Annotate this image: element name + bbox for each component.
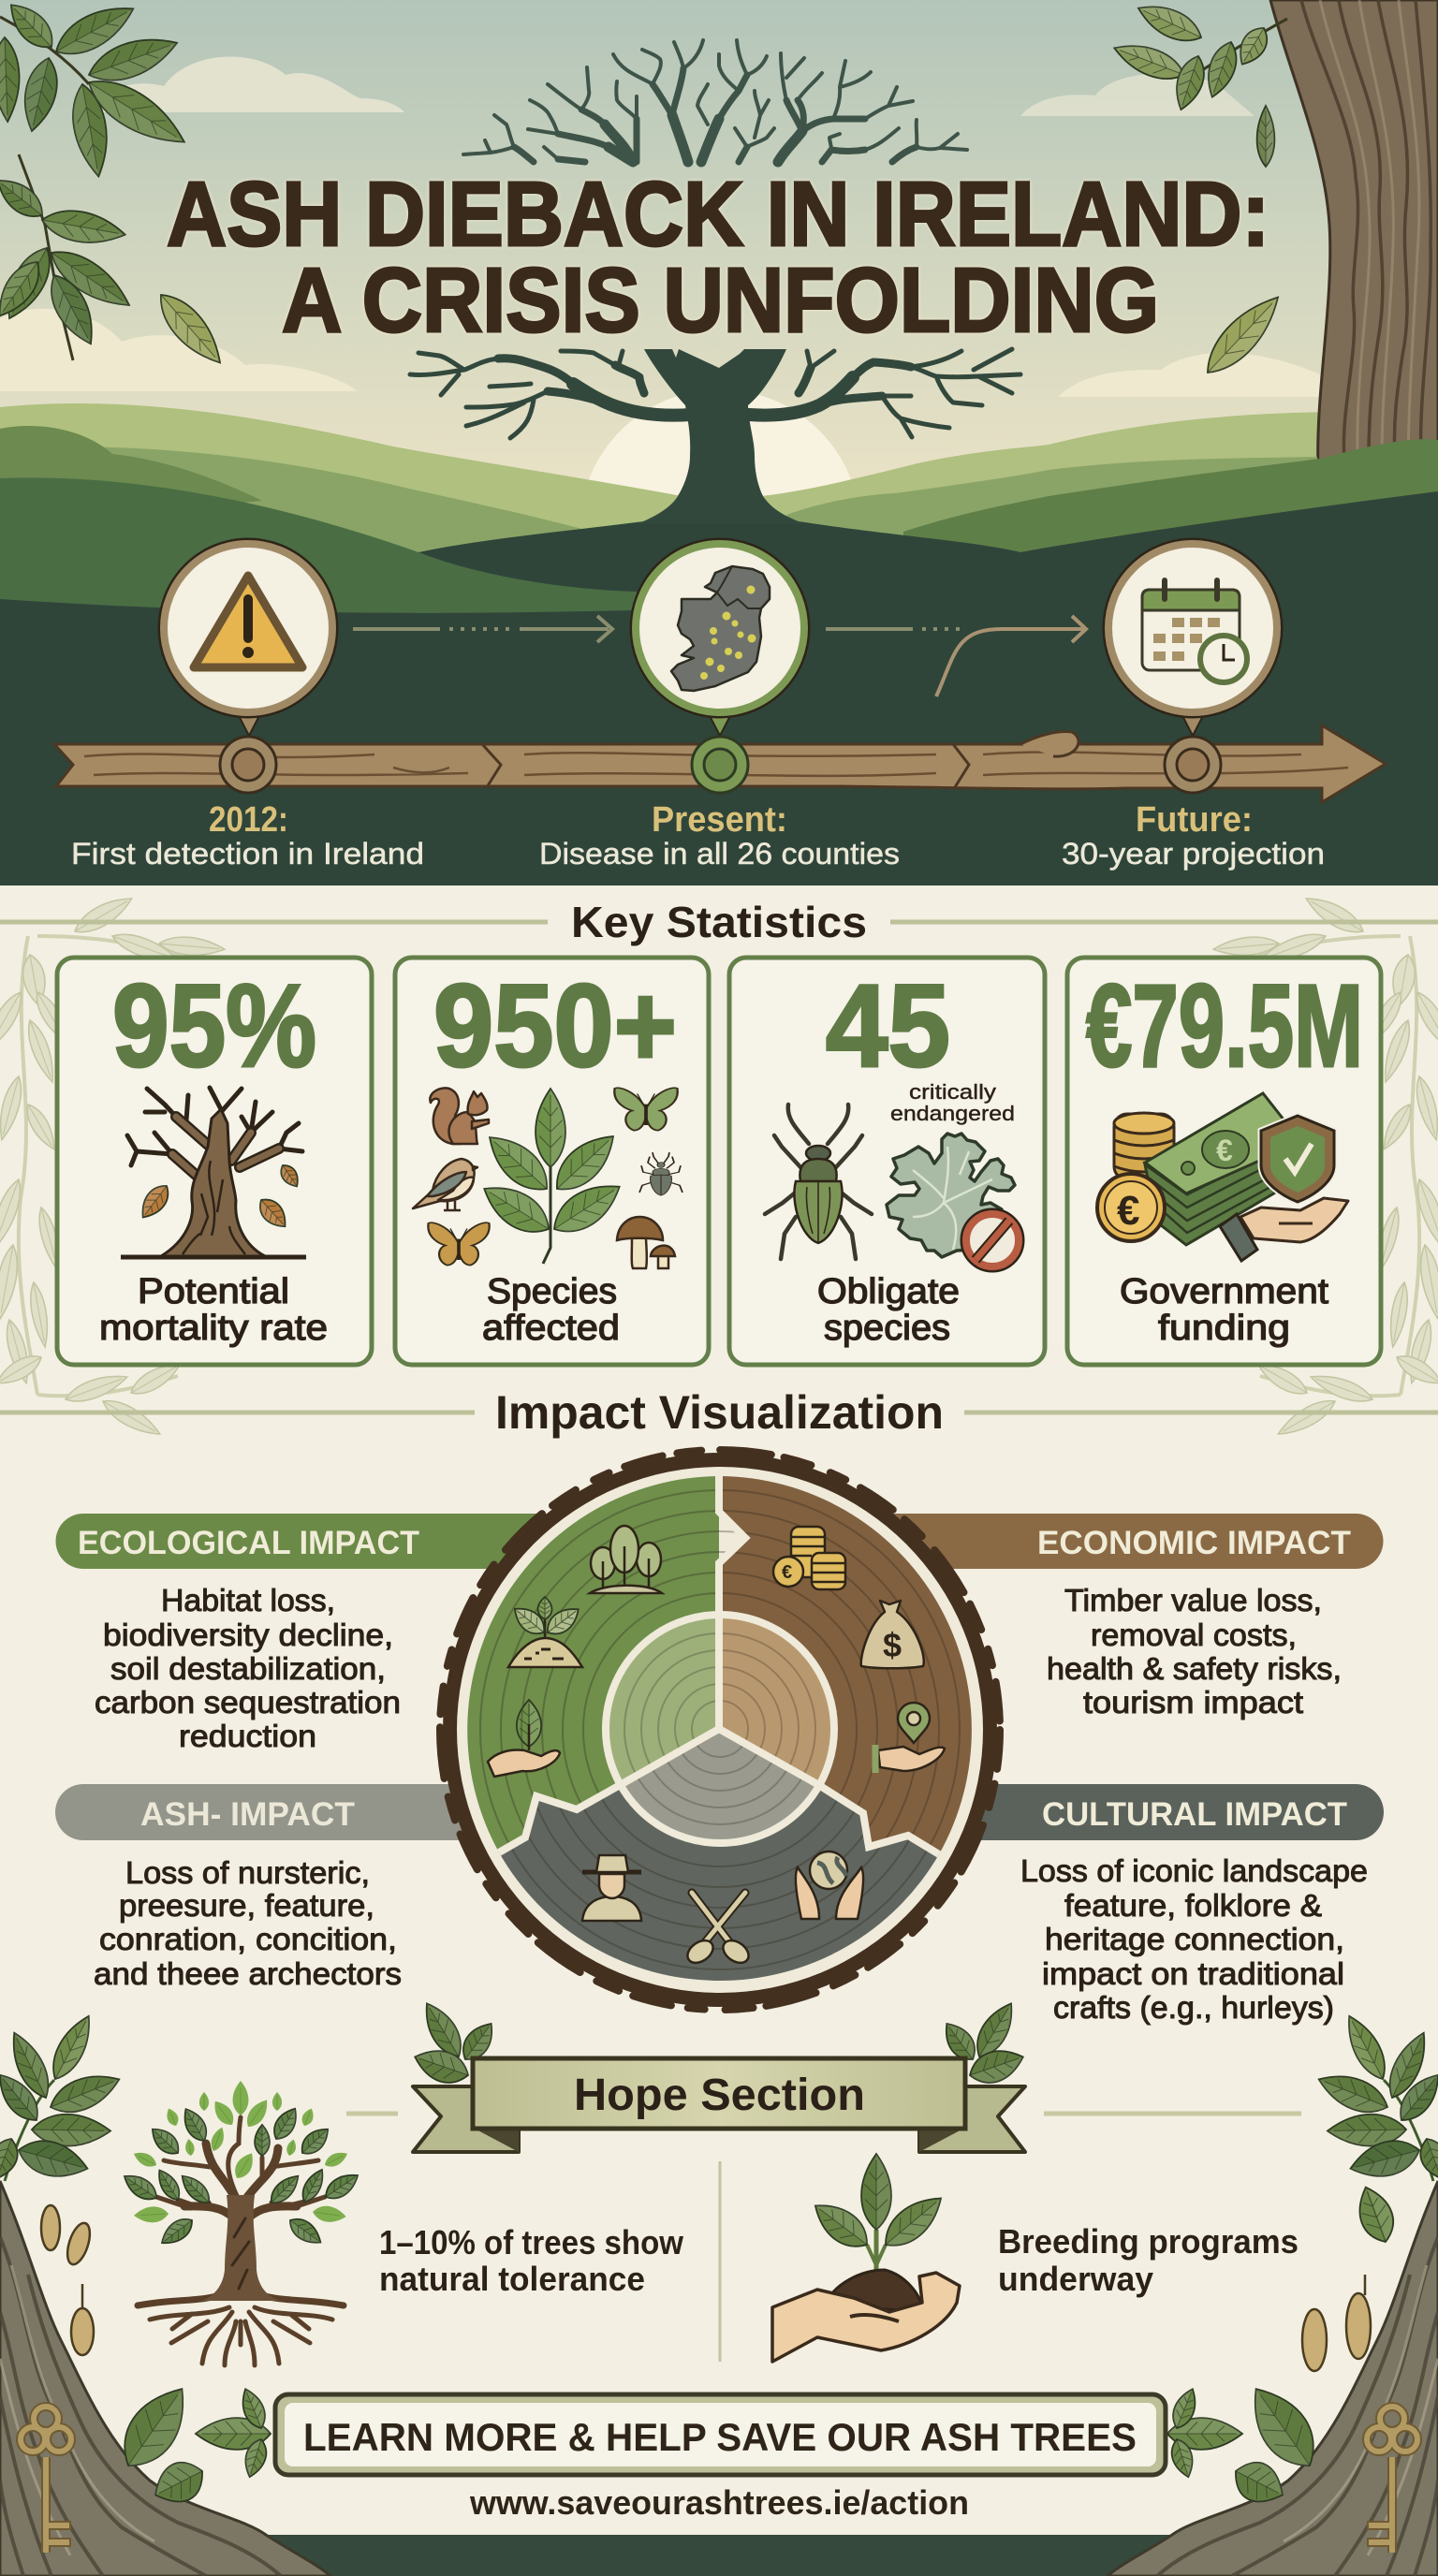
dark foreground ground [0, 491, 1438, 886]
divider [719, 2161, 721, 2362]
panel: economic impact: ECONOMIC IMPACT [1037, 1525, 1351, 1561]
mid hills [0, 426, 1438, 608]
left dark hill [0, 477, 637, 613]
heading: hope section banner: Hope Section [574, 2071, 865, 2120]
sector: economic [719, 1476, 972, 1854]
panel: ash impact: conration, concition, [99, 1922, 397, 1956]
label: Species [487, 1272, 617, 1311]
label: Potential [138, 1272, 289, 1311]
panel: cultural impact: heritage connection, [1045, 1922, 1344, 1956]
label [1120, 1272, 1328, 1348]
sector: ecological [467, 1476, 719, 1852]
icon: money, coins, shield and hand: € [1216, 1134, 1233, 1167]
icon: money, coins, shield and hand: € [1117, 1188, 1139, 1234]
timeline label: present [539, 800, 900, 871]
tree trunk and lower branches [410, 349, 1020, 524]
distant hills [0, 403, 1348, 580]
icon: crossed hurleys [683, 1893, 753, 1968]
timeline label: present: Disease in all 26 counties [539, 837, 900, 871]
icon: small beetle [639, 1152, 682, 1195]
call to action leaves [110, 2376, 1328, 2512]
call to action button: LEARN MORE & HELP SAVE OUR ASH TREES [303, 2415, 1137, 2459]
icon: coin stacks: € [782, 1562, 792, 1583]
label bar [56, 1514, 562, 1569]
heading: impact visualization: Impact Visualization [495, 1386, 944, 1439]
big tree trunk at right [1270, 0, 1438, 468]
icon: map of Ireland [671, 566, 770, 691]
arrow: present to future [826, 616, 1086, 696]
icon: orange butterfly [428, 1222, 490, 1266]
sector: cultural [499, 1729, 939, 1981]
icon: hand holding seedling [488, 1700, 560, 1777]
text: natural tolerance: natural tolerance [379, 2260, 645, 2298]
icon: seeds right [1302, 2182, 1401, 2371]
icon: coin stacks [773, 1527, 845, 1589]
sector dividers [499, 1476, 939, 1854]
description: carbon sequestration [95, 1685, 401, 1720]
trunk and branches [156, 2117, 325, 2301]
icon: mushrooms [617, 1217, 675, 1268]
chart: tree-ring impact wheel [440, 1450, 1000, 2010]
panel: economic impact: tourism impact [1083, 1685, 1303, 1720]
text: natural tolerance [379, 2223, 684, 2298]
roots [138, 2293, 344, 2365]
number: 950+ [433, 961, 677, 1091]
leaves: lower-left branch [0, 154, 138, 360]
icon: hands and globe [796, 1852, 863, 1919]
timeline label: future: Future: [1136, 800, 1253, 840]
timeline label: 2012: First detection in Ireland [71, 837, 424, 871]
label [99, 1272, 328, 1348]
label [817, 1272, 960, 1348]
description: reduction [179, 1719, 316, 1753]
icon: trees [590, 1526, 662, 1593]
timeline log arrow [54, 725, 1386, 802]
panel: cultural impact: feature, folklore & [1064, 1888, 1322, 1923]
milestone: 2012 [164, 544, 332, 793]
icon: seeds left [41, 2205, 95, 2355]
icon: lichen [887, 1134, 1019, 1266]
icon: key left [21, 2407, 71, 2553]
panel: economic impact: health & safety risks, [1047, 1651, 1342, 1686]
description: soil destabilization, [110, 1651, 386, 1686]
heading: hope section banner [346, 1998, 1301, 2152]
panel: ash impact: Loss of nursteric, [125, 1855, 370, 1890]
icon: warning triangle [194, 576, 302, 667]
icon: calendar and clock [1142, 580, 1247, 682]
heading: key statistics: Key Statistics [571, 898, 867, 946]
panel: ecological impact: ECOLOGICAL IMPACT [78, 1525, 419, 1561]
panel: stat card species [395, 958, 709, 1365]
title [167, 163, 1269, 351]
falling leaves [150, 285, 1289, 384]
number: 95% [112, 961, 316, 1091]
sun [580, 389, 860, 670]
panel: cultural impact: CULTURAL IMPACT [1042, 1796, 1347, 1833]
label: mortality rate [99, 1309, 328, 1348]
title: A CRISIS UNFOLDING [282, 249, 1159, 351]
text: natural tolerance: 1–10% of trees show [379, 2223, 684, 2261]
panel: cultural impact: impact on traditional [1042, 1956, 1344, 1991]
decorative foliage behind stat cards [0, 890, 1438, 1442]
icon: recovering ash tree [120, 2081, 362, 2365]
icon: person with hat [582, 1855, 641, 1921]
panel: header landscape [0, 0, 1438, 886]
timeline label: present: Present: [652, 800, 787, 840]
text: breeding programs [998, 2222, 1299, 2298]
arrow: 2012 to present [353, 616, 612, 642]
label: affected [482, 1309, 620, 1348]
panel: ash impact: ASH- IMPACT [140, 1796, 355, 1833]
icon: hand with map pin [875, 1703, 945, 1773]
website url: www.saveourashtrees.ie/action [469, 2483, 969, 2522]
leaves: top-left branch [0, 0, 194, 179]
bark edge [443, 1453, 997, 2007]
panel: stat card obligate species [729, 958, 1045, 1365]
note: critically [909, 1080, 996, 1104]
icon: dying tree [121, 1088, 306, 1257]
icon: money bag: $ [883, 1626, 902, 1664]
inner ring wedges [605, 1615, 719, 1785]
timeline label: future [1062, 800, 1325, 871]
label: Government [1120, 1272, 1328, 1311]
panel: economic impact: Timber value loss, [1064, 1583, 1322, 1617]
icon: sprout on soil [508, 1597, 584, 1667]
timeline label: future: 30-year projection [1062, 837, 1325, 871]
icon: beetle [765, 1105, 872, 1259]
label: Obligate [817, 1272, 960, 1311]
ribbon tails [413, 2086, 519, 2152]
bare ash tree crown above title [463, 40, 967, 162]
growth rings [480, 1490, 960, 1969]
description: biodiversity decline, [103, 1617, 393, 1652]
panel: cultural impact [964, 1784, 1384, 2025]
label: funding [1158, 1309, 1290, 1348]
icon: hand holding seedling [772, 2154, 960, 2362]
ribbon body [473, 2058, 965, 2129]
milestone: future [1108, 544, 1277, 793]
icon: key right [1367, 2407, 1417, 2553]
timeline label: 2012 [71, 800, 424, 871]
number: 45 [826, 961, 950, 1091]
note: endangered [890, 1102, 1015, 1125]
icon: squirrel [430, 1088, 489, 1144]
icon: ash leaf [476, 1089, 628, 1264]
corner bark: left and right roots [0, 2181, 1438, 2576]
leaves: top-right branch [1109, 0, 1287, 167]
icon: money bag [861, 1601, 924, 1668]
panel: stat card funding [1067, 958, 1381, 1365]
icon: bird [413, 1159, 477, 1210]
description: Habitat loss, [161, 1583, 335, 1617]
timeline label: 2012: 2012: [209, 800, 288, 840]
panel: ash impact: and theee archectors [94, 1956, 402, 1991]
description [95, 1583, 401, 1753]
banner sprigs [410, 1998, 1028, 2089]
clouds [0, 56, 1320, 397]
panel: ash impact [55, 1784, 487, 1991]
panel: stat card mortality [57, 958, 372, 1365]
corner sprigs [0, 2011, 1438, 2185]
foliage [120, 2081, 362, 2250]
label [482, 1272, 620, 1348]
panel: economic impact: removal costs, [1091, 1617, 1297, 1652]
panel: cultural impact: crafts (e.g., hurleys) [1053, 1990, 1334, 2025]
icon: prohibition sign [966, 1214, 1019, 1266]
title: ASH DIEBACK IN IRELAND: [167, 163, 1269, 265]
call to action button [275, 2394, 1166, 2475]
icon: money, coins, shield and hand [1097, 1093, 1348, 1261]
panel: ash impact: preesure, feature, [119, 1888, 374, 1923]
panel: ecological impact [56, 1514, 562, 1753]
milestone: present [636, 544, 804, 793]
panel: economic impact [880, 1514, 1384, 1720]
panel: cultural impact: Loss of iconic landscape [1020, 1853, 1368, 1888]
bubble [164, 544, 332, 712]
connector and node [234, 707, 264, 736]
sky [0, 0, 1438, 562]
text: breeding programs: Breeding programs [998, 2222, 1299, 2261]
label: species [824, 1309, 950, 1348]
text: breeding programs: underway [998, 2260, 1153, 2298]
note [890, 1080, 1015, 1125]
icon: green butterfly [614, 1088, 678, 1131]
